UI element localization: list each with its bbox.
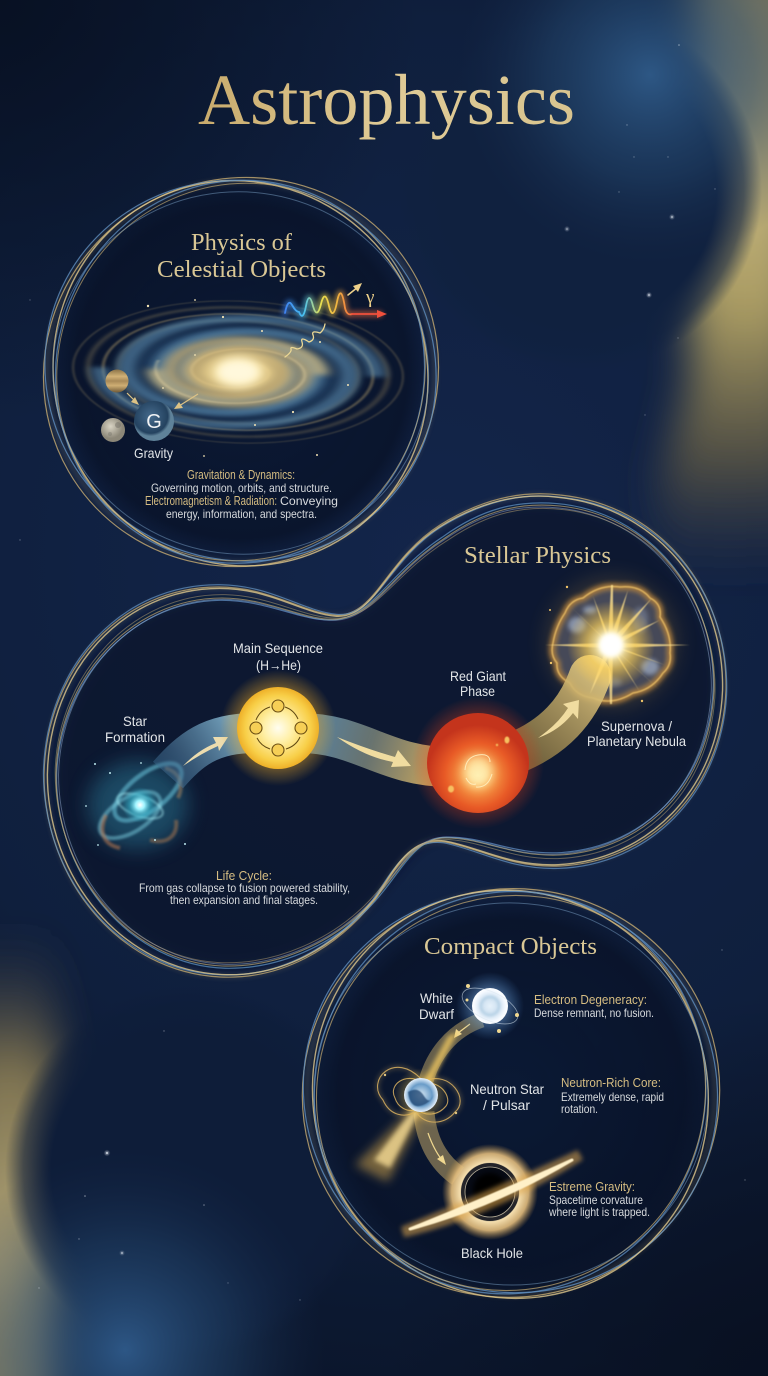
icon: electromagnetic wave bbox=[285, 283, 387, 357]
label: star formation: Star bbox=[123, 713, 147, 729]
label: supernova: Planetary Nebula bbox=[587, 733, 686, 749]
text block: gravitation and radiation: Electromagnetism & Radiation: bbox=[145, 494, 277, 508]
flow ribbons bbox=[424, 1020, 482, 1176]
text block: extreme gravity: Spacetime corvature bbox=[549, 1193, 643, 1207]
label: gravity: Gravity bbox=[134, 445, 173, 461]
icon: supernova shell bbox=[546, 577, 678, 709]
heading: stellar physics: Stellar Physics bbox=[464, 543, 611, 569]
text block: gravitation and radiation: Conveying bbox=[280, 494, 338, 508]
panel: physics of celestial objects bbox=[0, 105, 510, 639]
text block: extreme gravity bbox=[548, 1180, 650, 1219]
text block: gravitation and radiation: Governing motion, orbits, and structure. bbox=[151, 481, 332, 495]
text block: life cycle: Life Cycle: bbox=[216, 869, 272, 883]
arrow: white dwarf to neutron star bbox=[454, 1024, 470, 1038]
arrow: neutron star to black hole bbox=[428, 1133, 446, 1165]
icon: supernova core bbox=[545, 585, 690, 704]
label: neutron star: / Pulsar bbox=[483, 1097, 530, 1113]
label: main sequence: (H→He) bbox=[256, 657, 301, 673]
text block: extreme gravity: where light is trapped. bbox=[548, 1205, 650, 1219]
arrow: red giant to supernova bbox=[538, 700, 579, 738]
heading: physics of celestial objects bbox=[157, 230, 326, 283]
label: star formation bbox=[105, 713, 165, 745]
text block: life cycle: From gas collapse to fusion powered stability, bbox=[139, 881, 350, 895]
icon: red giant bbox=[412, 697, 544, 829]
text block: extreme gravity: Estreme Gravity: bbox=[549, 1180, 635, 1194]
text block: life cycle: then expansion and final stages. bbox=[170, 893, 318, 907]
panel 1 rings bbox=[0, 105, 510, 639]
icon: electromagnetic wave: γ bbox=[365, 287, 374, 308]
panel: stellar physics bbox=[41, 489, 729, 982]
panel 2 rings bbox=[41, 489, 729, 982]
text block: neutron-rich core: rotation. bbox=[561, 1102, 598, 1116]
text block: gravitation and radiation: Gravitation & Dynamics: bbox=[187, 468, 295, 482]
arrow: main sequence to red giant bbox=[337, 737, 411, 767]
text block: electron degeneracy: Electron Degeneracy: bbox=[534, 993, 647, 1007]
label: main sequence bbox=[233, 640, 323, 673]
label: supernova: Supernova / bbox=[601, 718, 672, 734]
label: white dwarf: White bbox=[420, 990, 453, 1006]
text block: life cycle bbox=[139, 869, 350, 907]
heading: physics of celestial objects: Physics of bbox=[191, 230, 292, 256]
icon: white dwarf bbox=[456, 972, 524, 1040]
icon: gravity ball: G bbox=[146, 411, 162, 433]
label: neutron star bbox=[470, 1081, 544, 1113]
label: star formation: Formation bbox=[105, 729, 165, 745]
text block: electron degeneracy: Dense remnant, no fusion. bbox=[534, 1006, 654, 1020]
label: neutron star: Neutron Star bbox=[470, 1081, 544, 1097]
text block: neutron-rich core: Neutron-Rich Core: bbox=[561, 1076, 661, 1090]
panel: compact objects bbox=[244, 824, 768, 1362]
flow ribbon: red giant to supernova bbox=[510, 676, 590, 755]
text block: gravitation and radiation: energy, information, and spectra. bbox=[166, 507, 317, 521]
label: white dwarf: Dwarf bbox=[419, 1006, 454, 1022]
icon: main sequence star bbox=[220, 670, 336, 786]
icon: neutron star with pulsar beam bbox=[355, 1032, 460, 1182]
text block: gravitation and radiation bbox=[145, 468, 338, 521]
label: red giant phase: Phase bbox=[460, 683, 495, 699]
spiral galaxy bbox=[71, 295, 405, 457]
icon: gravity ball bbox=[134, 401, 174, 441]
heading: physics of celestial objects: Celestial Objects bbox=[157, 257, 326, 283]
heading: compact objects: Compact Objects bbox=[424, 934, 597, 960]
label: white dwarf bbox=[419, 990, 454, 1022]
panel 3 rings bbox=[244, 824, 768, 1362]
arrows: gravity pull bbox=[127, 393, 198, 409]
text block: neutron-rich core: Extremely dense, rapid bbox=[561, 1090, 664, 1104]
label: supernova bbox=[587, 718, 686, 749]
icon: moon bbox=[101, 418, 125, 442]
text block: electron degeneracy bbox=[534, 993, 654, 1020]
label: black hole: Black Hole bbox=[461, 1245, 523, 1261]
arrow: star formation to main sequence bbox=[183, 737, 228, 766]
icon: black hole bbox=[403, 1144, 580, 1240]
label: red giant phase bbox=[450, 668, 506, 699]
label: main sequence: Main Sequence bbox=[233, 640, 323, 656]
title: Astrophysics bbox=[198, 60, 575, 140]
icon: jupiter-like planet bbox=[106, 370, 128, 392]
label: red giant phase: Red Giant bbox=[450, 668, 506, 684]
text block: neutron-rich core bbox=[561, 1076, 664, 1116]
flow ribbons bbox=[168, 733, 450, 775]
icon: star formation nebula bbox=[85, 753, 191, 849]
